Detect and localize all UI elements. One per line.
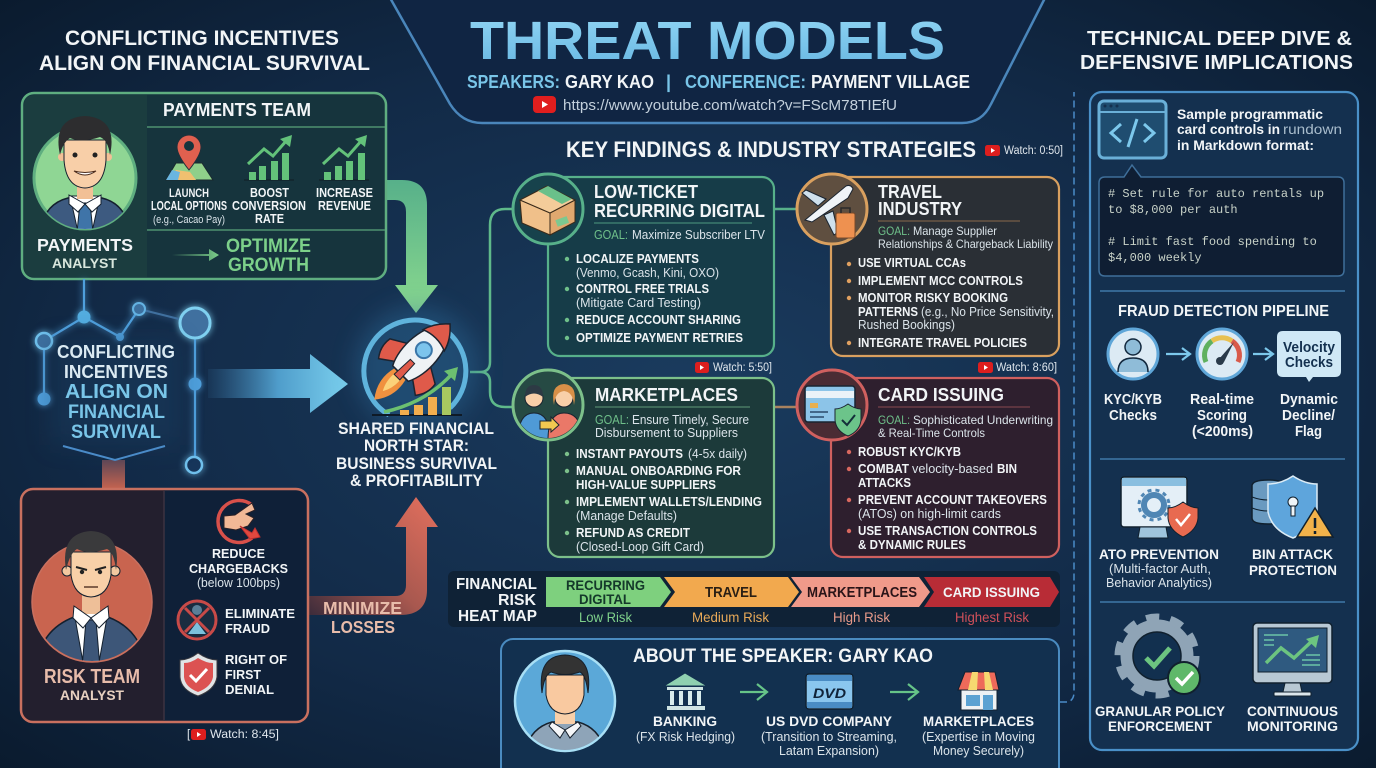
action labels: [151, 186, 373, 226]
optimize growth: [172, 235, 311, 276]
north star text: [336, 420, 497, 490]
optimize growth: OPTIMIZE: [226, 235, 311, 257]
icon: buyers and sellers: [513, 370, 583, 440]
panel: technical deep dive: [1090, 92, 1358, 750]
card bullets: Rushed Bookings): [858, 318, 955, 332]
BIN text: BIN ATTACK: [1252, 546, 1333, 562]
ATO text: [1099, 546, 1219, 590]
card goal: [878, 224, 1053, 251]
card bullets: (4-5x daily): [688, 447, 747, 461]
chargebacks text: [189, 546, 288, 590]
dashed connector: [1060, 92, 1074, 702]
analyst label: [37, 235, 133, 271]
card goal: Maximize Subscriber LTV: [632, 228, 766, 242]
heat map label: [456, 576, 537, 625]
card goal: & Real-Time Controls: [878, 426, 985, 440]
chargebacks text: (below 100bps): [197, 575, 280, 590]
network graphic: [36, 279, 210, 473]
segment: travel: [664, 577, 799, 625]
card bullets: ATTACKS: [858, 476, 911, 490]
optimize growth: GROWTH: [228, 254, 309, 276]
icon: plane and suitcase: [797, 174, 867, 244]
card title: [594, 182, 765, 221]
north star text: SHARED FINANCIAL: [338, 420, 494, 438]
card bullets: REDUCE ACCOUNT SHARING: [576, 313, 741, 327]
youtube link: https://www.youtube.com/watch?v=FScM78TIEfU: [563, 97, 897, 114]
heat map label: FINANCIAL: [456, 576, 537, 593]
icon: ATO prevention: [1121, 477, 1198, 538]
panel: marketplaces: [513, 370, 774, 557]
granular text: ENFORCEMENT: [1108, 718, 1212, 734]
pipeline step: velocity: Flag: [1295, 424, 1322, 440]
card bullets: MONITOR RISKY BOOKING: [858, 291, 1008, 305]
minimize losses label: MINIMIZE: [323, 598, 402, 618]
card bullets: (e.g., No Price Sensitivity,: [921, 305, 1054, 319]
card title: INDUSTRY: [878, 199, 962, 219]
pipeline step: scoring: Real-time: [1190, 392, 1254, 408]
action labels: LOCAL OPTIONS: [151, 199, 227, 213]
watch tag 8:45: Watch: 8:45]: [210, 729, 279, 741]
card bullets: BIN: [997, 462, 1017, 476]
fraud text: FRAUD: [225, 621, 270, 636]
career labels: Money Securely): [933, 744, 1024, 758]
heat map label: RISK: [498, 592, 537, 609]
heat map label: HEAT MAP: [458, 608, 537, 625]
card bullets: (Venmo, Gcash, Kini, OXO): [576, 266, 719, 280]
risk label: [44, 666, 140, 703]
icon: reduce chargebacks: [218, 500, 260, 542]
arrow: career step: [890, 684, 918, 700]
ATO text: ATO PREVENTION: [1099, 546, 1219, 562]
chargebacks text: REDUCE: [212, 546, 265, 561]
card goal: GOAL:: [595, 413, 629, 427]
right heading: DEFENSIVE IMPLICATIONS: [1080, 52, 1353, 74]
callout: conflicting incentives: INCENTIVES: [64, 362, 168, 382]
segment: travel: TRAVEL: [705, 585, 757, 601]
icon: granular policy gear: [1119, 618, 1200, 694]
analyst label: ANALYST: [52, 255, 117, 271]
code intro text: card controls in: [1177, 121, 1280, 137]
pipeline step: velocity: [1277, 331, 1341, 440]
arrow: payments to north star: [386, 180, 438, 313]
speakers line: CONFERENCE:: [685, 72, 806, 92]
card bullets: [565, 447, 762, 554]
icon: revenue chart: [319, 135, 369, 180]
speakers line: |: [666, 72, 671, 92]
segment: recurring digital: Low Risk: [579, 610, 632, 625]
chevron connector: [63, 446, 165, 490]
card goal: [878, 413, 1053, 440]
card title: LOW-TICKET: [594, 182, 698, 202]
risk label: ANALYST: [60, 687, 124, 703]
card bullets: & DYNAMIC RULES: [858, 538, 966, 552]
card title: MARKETPLACES: [595, 385, 738, 405]
pipeline step: KYC: KYC/KYB: [1104, 392, 1162, 408]
card goal: GOAL:: [594, 228, 628, 242]
card goal: Manage Supplier: [913, 224, 997, 238]
callout: conflicting incentives: SURVIVAL: [71, 422, 161, 443]
avatar: speaker: [515, 651, 615, 752]
action labels: RATE: [255, 212, 284, 226]
card bullets: USE VIRTUAL CCAs: [858, 256, 966, 270]
title panel: [389, 0, 1046, 123]
action labels: INCREASE: [316, 186, 373, 200]
card goal: GOAL:: [878, 413, 910, 427]
card bullets: INSTANT PAYOUTS: [576, 447, 683, 461]
code intro text: rundown: [1283, 121, 1342, 137]
north star text: BUSINESS SURVIVAL: [336, 455, 497, 473]
watch tag 5:50: Watch: 5:50]: [713, 362, 772, 374]
panel: travel industry: [797, 174, 1059, 356]
financial risk heat map: [448, 571, 1060, 627]
ATO text: (Multi-factor Auth,: [1109, 562, 1211, 576]
card bullets: OPTIMIZE PAYMENT RETRIES: [576, 331, 743, 345]
career labels: Latam Expansion): [779, 744, 879, 758]
monitoring text: CONTINUOUS: [1247, 703, 1338, 719]
action labels: BOOST: [250, 186, 289, 200]
watch tag 8:45: [187, 729, 279, 741]
card bullets: USE TRANSACTION CONTROLS: [858, 524, 1037, 538]
pipeline heading: FRAUD DETECTION PIPELINE: [1118, 303, 1329, 320]
card goal: Disbursement to Suppliers: [595, 426, 738, 440]
card bullets: (Mitigate Card Testing): [576, 296, 701, 310]
icon: dvd: DVD: [813, 685, 846, 701]
arrow: career step: [740, 684, 767, 700]
career labels: (Expertise in Moving: [922, 730, 1035, 744]
minimize losses label: LOSSES: [331, 617, 395, 637]
speakers line: PAYMENT VILLAGE: [811, 72, 970, 92]
segment: recurring digital: RECURRING: [566, 577, 645, 593]
icon: code window: [1099, 101, 1166, 158]
arrow: conflict to north star: [208, 354, 348, 413]
segment: card issuing: [924, 577, 1059, 625]
watch tag 8:60: Watch: 8:60]: [996, 362, 1057, 374]
key findings heading: KEY FINDINGS & INDUSTRY STRATEGIES: [566, 137, 976, 162]
speakers line: SPEAKERS:: [467, 72, 560, 92]
card bullets: IMPLEMENT WALLETS/LENDING: [576, 495, 762, 509]
code block: [1099, 165, 1344, 276]
minimize losses label: [323, 598, 402, 637]
icon: monitoring screen: [1253, 623, 1332, 696]
card bullets: [847, 445, 1047, 552]
north star text: NORTH STAR:: [364, 437, 469, 455]
key findings heading: Watch: 0:50]: [1004, 145, 1063, 157]
monitoring text: MONITORING: [1247, 718, 1338, 734]
pipeline step: scoring: [1190, 329, 1254, 440]
icon: conversion chart: [244, 135, 294, 180]
arrow: pipeline: [1166, 348, 1190, 360]
card bullets: PATTERNS: [858, 305, 918, 319]
north star text: & PROFITABILITY: [350, 472, 483, 490]
career labels: BANKING: [653, 713, 717, 729]
career labels: US DVD COMPANY: [766, 713, 893, 729]
icon: eliminate fraud: [178, 601, 216, 639]
icon: shield: [180, 653, 217, 696]
card goal: [595, 413, 749, 440]
panel: about the speaker: [501, 639, 1059, 768]
watch tag 8:45: [: [187, 729, 191, 741]
granular text: GRANULAR POLICY: [1095, 703, 1226, 719]
card bullets: (ATOs) on high-limit cards: [858, 507, 1001, 521]
segment: card issuing: Highest Risk: [955, 610, 1029, 625]
connectors between cards: [774, 208, 800, 210]
pipeline step: scoring: (<200ms): [1192, 424, 1253, 440]
card bullets: MANUAL ONBOARDING FOR: [576, 464, 741, 478]
speakers line: [467, 72, 970, 92]
callout: conflicting incentives: FINANCIAL: [68, 402, 165, 423]
icon: rocket north star: [351, 301, 479, 430]
card bullets: (Manage Defaults): [576, 509, 677, 523]
callout: conflicting incentives: [50, 340, 180, 445]
pipeline step: velocity: Dynamic: [1280, 392, 1338, 408]
card goal: Sophisticated Underwriting: [913, 413, 1053, 427]
denial text: [225, 652, 287, 697]
card bullets: IMPLEMENT MCC CONTROLS: [858, 274, 1023, 288]
segment: marketplaces: [791, 577, 930, 625]
connector: north star to cards: [470, 209, 515, 407]
card goal: GOAL:: [878, 224, 910, 238]
left heading: CONFLICTING INCENTIVES: [65, 27, 339, 50]
denial text: RIGHT OF: [225, 652, 287, 667]
card bullets: HIGH-VALUE SUPPLIERS: [576, 478, 716, 492]
risk label: RISK TEAM: [44, 666, 140, 688]
card bullets: velocity-based: [912, 462, 993, 476]
pipeline step: velocity: Checks: [1285, 354, 1333, 371]
action labels: REVENUE: [318, 199, 371, 213]
avatar: payments analyst: [34, 116, 136, 232]
left heading: [39, 27, 370, 75]
payments heading: PAYMENTS TEAM: [163, 100, 311, 120]
icon: dvd: [806, 674, 853, 709]
segment: travel: Medium Risk: [692, 610, 769, 625]
BIN text: PROTECTION: [1249, 562, 1337, 578]
main title: THREAT MODELS: [470, 11, 945, 71]
left heading: ALIGN ON FINANCIAL SURVIVAL: [39, 52, 370, 75]
callout: conflicting incentives: ALIGN ON: [65, 381, 168, 403]
code block: to $8,000 per auth: [1108, 203, 1238, 217]
BIN text: [1249, 546, 1337, 578]
granular text: [1095, 703, 1226, 734]
pipeline step: scoring: Scoring: [1197, 408, 1247, 424]
panel: payments team: [22, 93, 386, 279]
card title: CARD ISSUING: [878, 385, 1004, 405]
code intro text: in Markdown format:: [1177, 137, 1314, 153]
speakers line: GARY KAO: [565, 72, 654, 92]
card title: [878, 182, 962, 219]
panel: risk team: [21, 489, 308, 722]
code intro text: Sample programmatic: [1177, 106, 1323, 122]
avatar: risk analyst: [32, 531, 152, 668]
right heading: TECHNICAL DEEP DIVE &: [1087, 28, 1352, 50]
career labels: (Transition to Streaming,: [761, 730, 897, 744]
career labels: [636, 713, 1035, 758]
fraud text: ELIMINATE: [225, 606, 295, 621]
icon: box: [513, 174, 583, 244]
card bullets: COMBAT: [858, 462, 909, 476]
analyst label: PAYMENTS: [37, 235, 133, 255]
card bullets: (Closed-Loop Gift Card): [576, 540, 704, 554]
right heading: [1080, 28, 1353, 74]
pipeline step: velocity: Decline/: [1282, 408, 1335, 424]
callout: conflicting incentives: CONFLICTING: [57, 342, 175, 362]
connector lower cards: [774, 406, 800, 408]
pipeline step: KYC: [1104, 329, 1162, 424]
code block: # Set rule for auto rentals up: [1108, 187, 1324, 201]
segment: recurring digital: DIGITAL: [579, 591, 631, 607]
action labels: CONVERSION: [232, 199, 306, 213]
career labels: (FX Risk Hedging): [636, 730, 735, 744]
card title: TRAVEL: [878, 182, 942, 202]
icon: store: [958, 672, 999, 710]
card bullets: REFUND AS CREDIT: [576, 526, 690, 540]
card bullets: ROBUST KYC/KYB: [858, 445, 961, 459]
action labels: (e.g., Cacao Pay): [153, 214, 225, 226]
card title: RECURRING DIGITAL: [594, 201, 765, 221]
code intro text: [1177, 106, 1342, 153]
card bullets: CONTROL FREE TRIALS: [576, 282, 709, 296]
card goal: Relationships & Chargeback Liability: [878, 237, 1053, 251]
denial text: DENIAL: [225, 682, 274, 697]
monitoring text: [1247, 703, 1338, 734]
card bullets: PREVENT ACCOUNT TAKEOVERS: [858, 493, 1047, 507]
card bullets: [565, 252, 743, 345]
code block: $4,000 weekly: [1108, 251, 1202, 265]
icon: card and shield: [797, 370, 867, 440]
card bullets: INTEGRATE TRAVEL POLICIES: [858, 336, 1027, 350]
panel: card issuing: [797, 370, 1059, 557]
card goal: Ensure Timely, Secure: [632, 413, 749, 427]
career labels: MARKETPLACES: [923, 713, 1034, 729]
arrow: risk to north star: [308, 497, 438, 615]
icon: BIN attack protection: [1252, 476, 1333, 538]
segment: card issuing: CARD ISSUING: [943, 584, 1040, 600]
segment: marketplaces: High Risk: [833, 610, 890, 625]
action labels: LAUNCH: [169, 186, 209, 200]
panel: low-ticket recurring digital: [513, 174, 774, 356]
pipeline step: KYC: Checks: [1109, 408, 1157, 424]
pipeline step: velocity: Velocity: [1283, 339, 1336, 356]
speaker heading: ABOUT THE SPEAKER: GARY KAO: [633, 646, 933, 667]
card bullets: LOCALIZE PAYMENTS: [576, 252, 699, 266]
chargebacks text: CHARGEBACKS: [189, 561, 288, 576]
card bullets: [847, 256, 1054, 350]
ATO text: Behavior Analytics): [1106, 576, 1212, 590]
arrow: pipeline: [1253, 348, 1273, 360]
segment: marketplaces: MARKETPLACES: [807, 585, 917, 601]
icon: map pin: [166, 135, 213, 180]
icon: bank: [664, 673, 707, 710]
segment: recurring digital: [546, 577, 671, 625]
denial text: FIRST: [225, 667, 261, 682]
code block: # Limit fast food spending to: [1108, 235, 1317, 249]
fraud text: [225, 606, 295, 636]
